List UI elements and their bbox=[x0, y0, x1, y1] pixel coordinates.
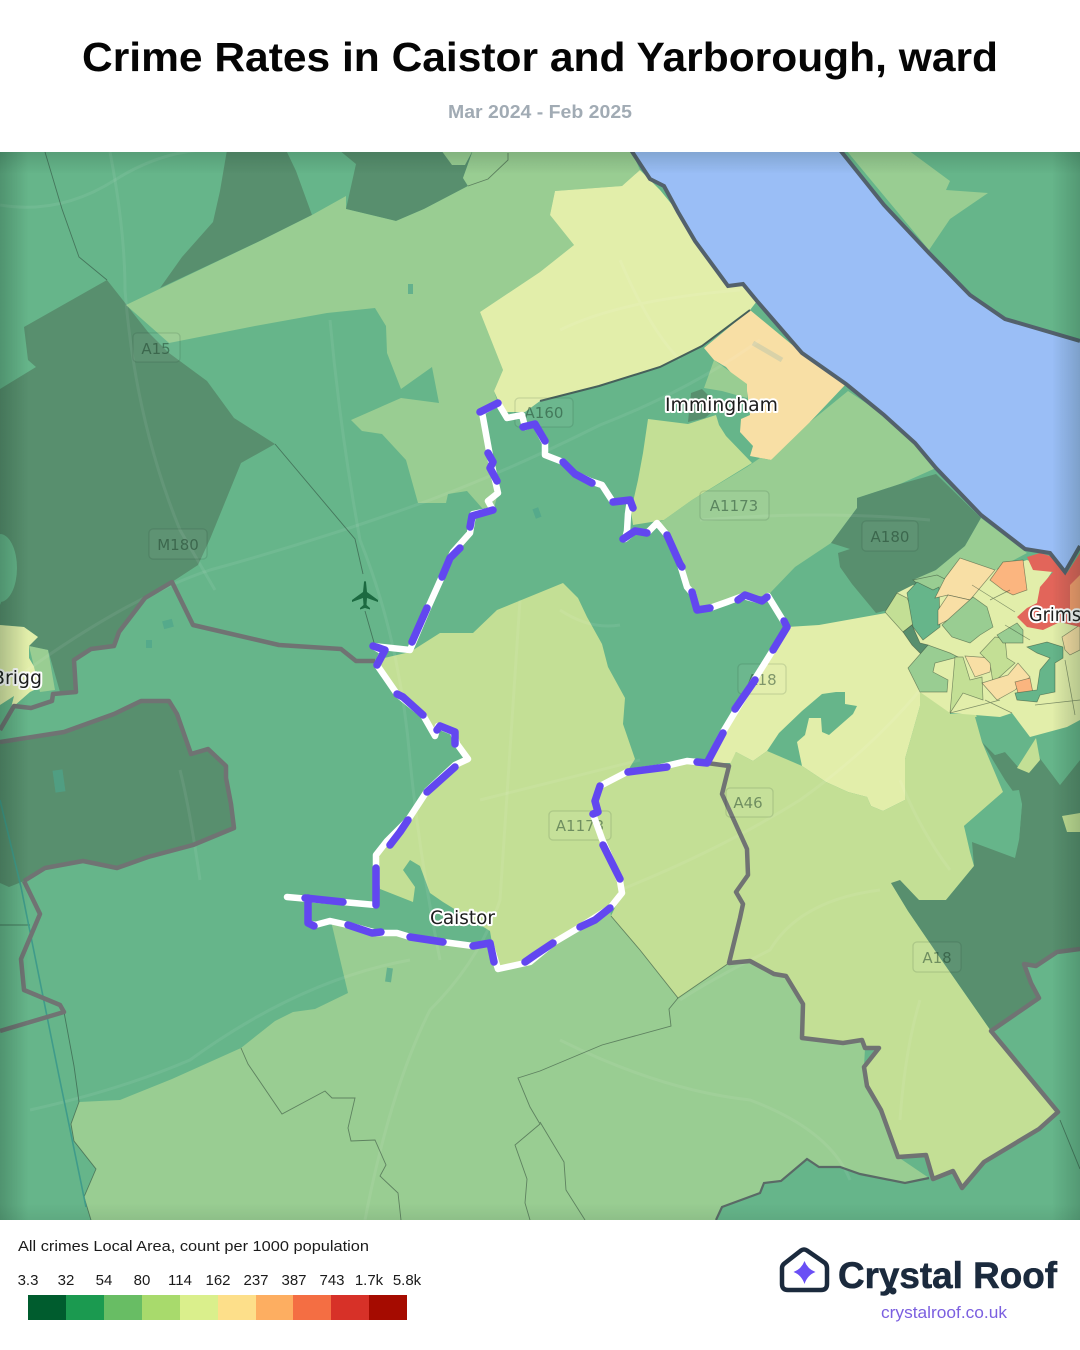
purple dashes bbox=[305, 403, 787, 962]
area: orange ward Immingham docks bbox=[704, 310, 846, 460]
area: light green south wards bbox=[71, 908, 929, 1220]
road label: A18 north: A18 bbox=[747, 671, 777, 689]
white outline bbox=[287, 403, 787, 969]
area: mid green patch in pale ward bbox=[767, 692, 857, 766]
area: yellow-green ward inside the ward outline bbox=[376, 583, 635, 969]
area: mid green patch west bbox=[0, 534, 17, 602]
area: large yellow-green ward south east bbox=[722, 690, 1058, 1188]
logo wordmark: Crystal Roof bbox=[838, 1255, 1058, 1296]
river: thin teal line bbox=[0, 800, 86, 1207]
legend values: 32 bbox=[58, 1272, 74, 1289]
legend values: 114 bbox=[168, 1272, 192, 1289]
roads: faint road network bbox=[0, 149, 950, 1220]
logo: Crystal Roof bbox=[782, 1250, 1058, 1322]
area: light green ward A1173 bbox=[657, 391, 936, 610]
road label: A160: A160 bbox=[525, 404, 563, 422]
area: Immingham small wards bbox=[704, 360, 747, 398]
road label: A180 bbox=[862, 521, 918, 551]
area: large light green ward north bbox=[126, 150, 640, 508]
road label: A18 north bbox=[738, 664, 786, 694]
area: mid green wards south of Grimsby bbox=[964, 790, 1022, 858]
place label: Caistor: Caistor bbox=[430, 907, 495, 929]
area: dark ward A180 bbox=[831, 474, 981, 613]
area: yellow-green ward east of outline bbox=[593, 761, 748, 998]
water: pond details bbox=[53, 284, 542, 982]
road label: A15 bbox=[133, 333, 180, 362]
area: dark wards north west bbox=[0, 150, 473, 692]
road label: A1173 south: A1173 bbox=[556, 817, 604, 835]
road label: M180 bbox=[149, 529, 207, 559]
legend values: 743 bbox=[319, 1272, 345, 1289]
legend values: 54 bbox=[96, 1272, 112, 1289]
area: pale yellow ward north bbox=[480, 170, 757, 412]
water: Humber estuary bbox=[631, 150, 1080, 572]
panel: choropleth map bbox=[0, 149, 1080, 1220]
road label: A160 bbox=[515, 398, 573, 427]
area: Grimsby small wards bbox=[885, 518, 1080, 737]
area: dark ward south west with grey border bbox=[0, 701, 234, 887]
icon: airport plane bbox=[352, 581, 378, 610]
title: Crime Rates in Caistor and Yarborough, ward bbox=[82, 34, 998, 80]
road label: A46: A46 bbox=[733, 794, 763, 812]
road label: A18 south bbox=[913, 942, 961, 972]
legend values: 5.8k bbox=[393, 1272, 422, 1289]
road label: A18 south: A18 bbox=[922, 949, 952, 967]
legend colour bar bbox=[28, 1295, 407, 1320]
area: pale yellow ward east of outline bbox=[707, 613, 920, 811]
road label: A1173 north bbox=[700, 491, 769, 520]
icon: key drop on the letter y bbox=[890, 1288, 896, 1294]
area: Brigg town wards bbox=[0, 625, 55, 706]
legend values: 3.3 bbox=[18, 1272, 38, 1289]
legend values: 1.7k bbox=[355, 1272, 384, 1289]
logo url: crystalroof.co.uk bbox=[881, 1304, 1008, 1322]
road label: A46 bbox=[726, 788, 773, 817]
road label: M180: M180 bbox=[157, 536, 199, 554]
road label: A1173 south bbox=[549, 811, 611, 840]
area: dark ward south east bbox=[891, 742, 1080, 1031]
boundary: estuary shoreline bbox=[631, 150, 1080, 572]
map edge shading bbox=[0, 152, 1080, 1220]
legend values: 237 bbox=[243, 1272, 269, 1289]
area: north bank light ward bbox=[846, 150, 988, 250]
place label: Immingham: Immingham bbox=[665, 394, 778, 416]
legend values: 162 bbox=[205, 1272, 231, 1289]
legend values: 80 bbox=[134, 1272, 150, 1289]
legend values bbox=[18, 1272, 422, 1289]
boundary: grey district lines bbox=[0, 582, 1080, 1188]
icon: house with sparkle bbox=[782, 1250, 827, 1290]
road label: A1173 north: A1173 bbox=[710, 497, 758, 515]
boundary: dark line north of ward bbox=[540, 310, 750, 401]
legend title: All crimes Local Area, count per 1000 population bbox=[18, 1238, 369, 1255]
legend bbox=[18, 1238, 422, 1320]
subtitle: date range: Mar 2024 - Feb 2025 bbox=[448, 102, 632, 122]
thin ward boundaries bbox=[0, 152, 1080, 1220]
ward outline: Caistor and Yarborough bbox=[287, 403, 787, 969]
area: yellow-green ward west of Immingham bbox=[631, 415, 752, 525]
road label: A15: A15 bbox=[141, 340, 171, 358]
road label: A180: A180 bbox=[871, 528, 909, 546]
legend values: 387 bbox=[281, 1272, 307, 1289]
